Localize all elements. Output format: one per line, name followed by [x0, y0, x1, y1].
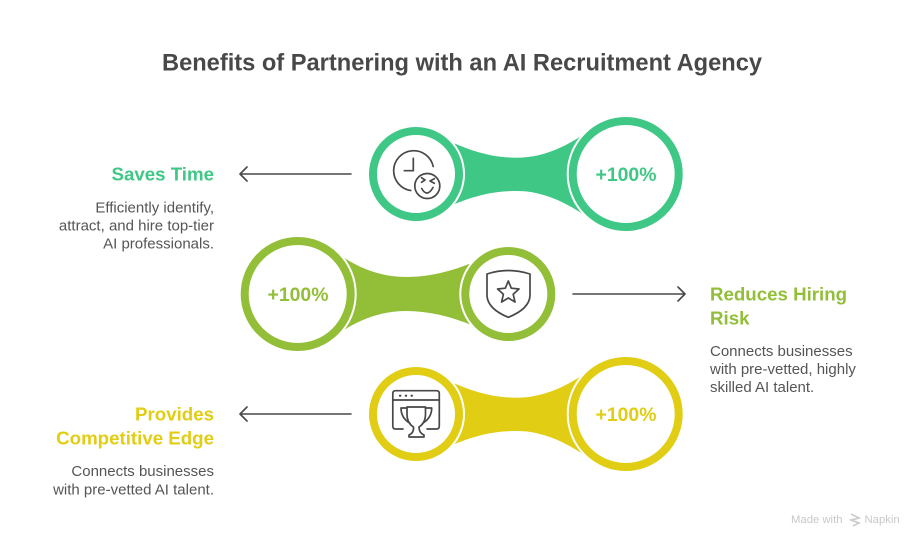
title: Benefits of Partnering with an AI Recruitment Agency	[162, 50, 763, 76]
watermark: made with Napkin	[791, 514, 900, 526]
gap: competitive edge large circle	[567, 355, 685, 473]
small ring: competitive edge	[373, 371, 459, 457]
gap: saves time small circle	[367, 125, 465, 223]
large ring: reduces hiring risk	[245, 241, 351, 347]
text block: competitive edge	[52, 404, 214, 498]
gap: reduces hiring risk large circle	[239, 235, 357, 353]
icon: shield with star	[487, 270, 530, 317]
heading: reduces hiring risk: Risk	[710, 308, 750, 328]
gap: saves time large circle	[567, 115, 685, 233]
heading: competitive edge: Provides	[135, 404, 214, 425]
gap: reduces hiring risk small circle	[459, 245, 557, 343]
description: saves time: Efficiently identify,	[95, 199, 214, 216]
heading: reduces hiring risk: Reduces Hiring	[710, 284, 847, 304]
text block: saves time	[59, 164, 214, 252]
arrow: reduces hiring risk	[573, 287, 685, 301]
connector: saves time	[450, 133, 586, 216]
connector: competitive edge	[450, 373, 586, 456]
panel: saves time graphic	[367, 115, 685, 233]
heading: saves time: Saves Time	[111, 164, 214, 185]
icon: clock with smiling face	[394, 151, 440, 198]
arrow: saves time	[240, 167, 351, 181]
large ring: saves time	[573, 121, 679, 227]
connector: reduces hiring risk	[337, 253, 474, 334]
icon: napkin logo	[851, 514, 859, 526]
watermark: made with Napkin: Made with	[791, 514, 842, 526]
panel: competitive edge graphic	[367, 355, 685, 473]
description: reduces hiring risk: skilled AI talent.	[710, 379, 814, 396]
gap: competitive edge small circle	[367, 365, 465, 463]
description: competitive edge: Connects businesses	[71, 463, 214, 480]
description: reduces hiring risk: with pre-vetted, highly	[709, 361, 856, 378]
heading: competitive edge: Competitive Edge	[56, 428, 214, 449]
arrow: competitive edge	[240, 407, 351, 421]
value: competitive edge: +100%	[596, 404, 656, 426]
description: saves time: AI professionals.	[103, 235, 214, 252]
icon: browser window with trophy	[393, 391, 439, 437]
large ring: competitive edge	[573, 361, 679, 467]
small ring: saves time	[373, 131, 459, 217]
description: competitive edge: with pre-vetted AI talent.	[52, 482, 214, 498]
panel: reduces hiring risk graphic	[239, 235, 557, 353]
text block: reduces hiring risk	[709, 284, 856, 396]
description: reduces hiring risk: Connects businesses	[710, 343, 853, 360]
value: reduces hiring risk: +100%	[268, 284, 328, 306]
small ring: reduces hiring risk	[465, 251, 551, 337]
watermark: made with Napkin: Napkin	[864, 514, 900, 526]
description: saves time: attract, and hire top-tier	[59, 217, 214, 234]
value: saves time: +100%	[596, 164, 656, 186]
